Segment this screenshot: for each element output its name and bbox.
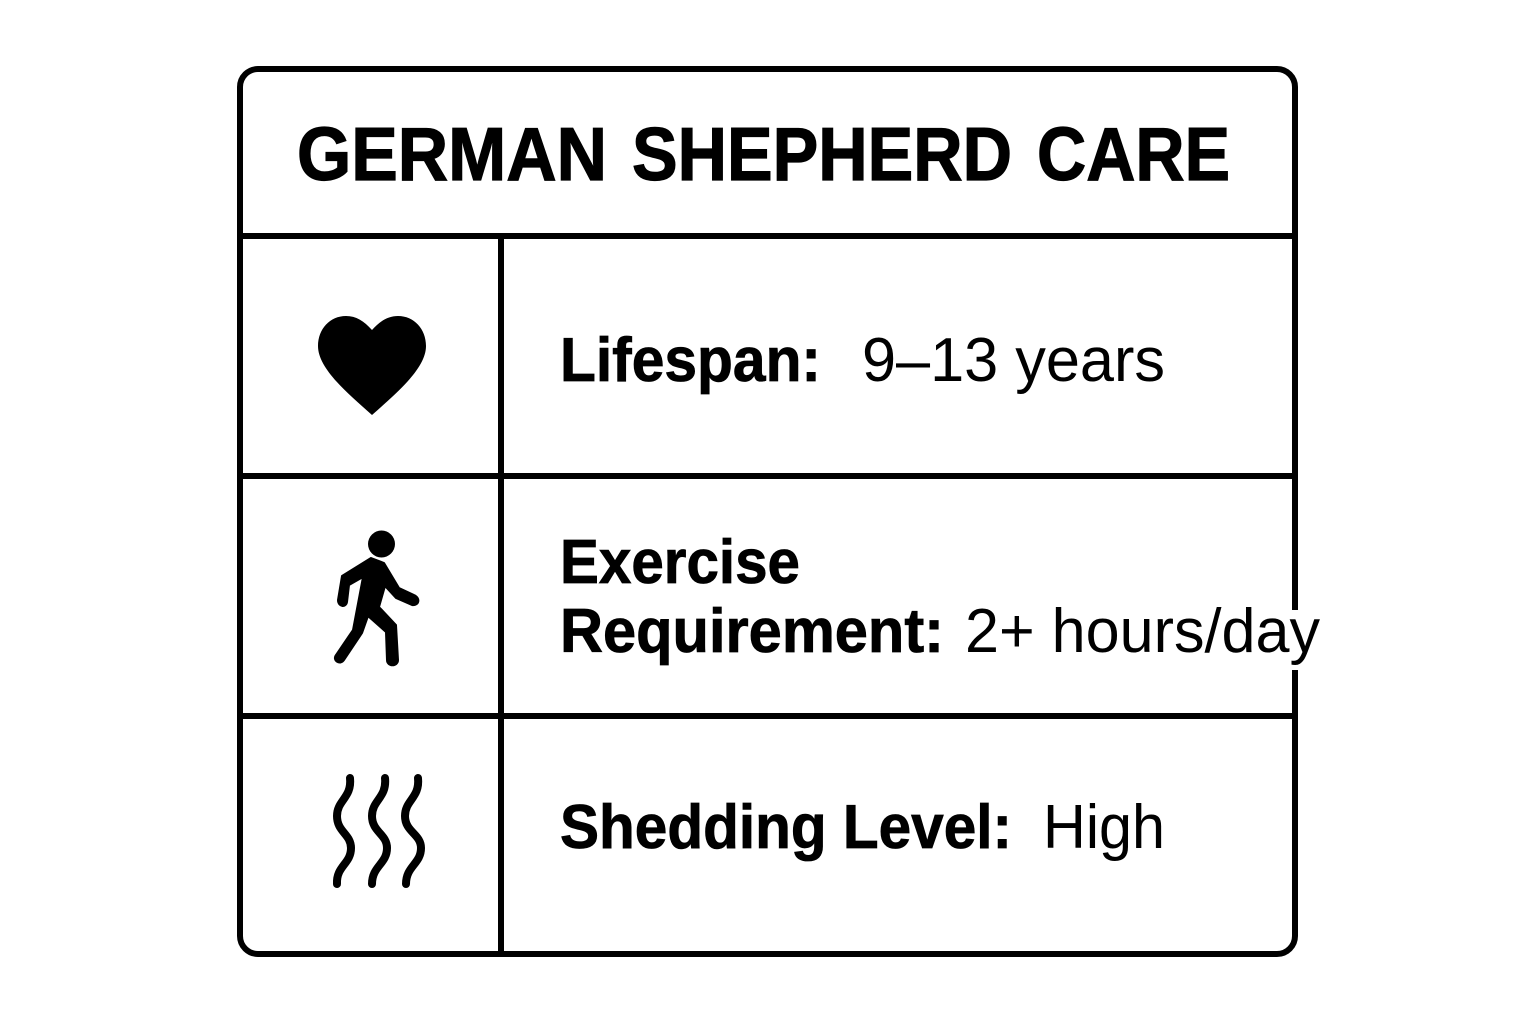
- exercise value: 2+ hours/day: [965, 597, 1320, 666]
- icon: walking person: [335, 530, 418, 665]
- icon: heart: [318, 316, 426, 415]
- shedding label: Shedding Level:: [560, 793, 1012, 862]
- exercise label: Exercise: [560, 528, 800, 597]
- title: SHEPHERD: [632, 112, 1012, 196]
- shedding value: High: [1043, 793, 1165, 862]
- title: GERMAN: [297, 112, 607, 196]
- row: shedding level: [337, 778, 1165, 884]
- lifespan label: Lifespan:: [560, 326, 821, 395]
- title: [297, 112, 1230, 196]
- requirement label: Requirement:: [560, 597, 944, 666]
- row: exercise requirement: [335, 528, 1320, 666]
- lifespan value: 9–13 years: [862, 326, 1165, 395]
- icon: shedding wavy lines: [337, 778, 421, 884]
- row: lifespan: [318, 316, 1165, 415]
- table frame and grid lines: [240, 69, 1302, 954]
- title: CARE: [1037, 112, 1230, 196]
